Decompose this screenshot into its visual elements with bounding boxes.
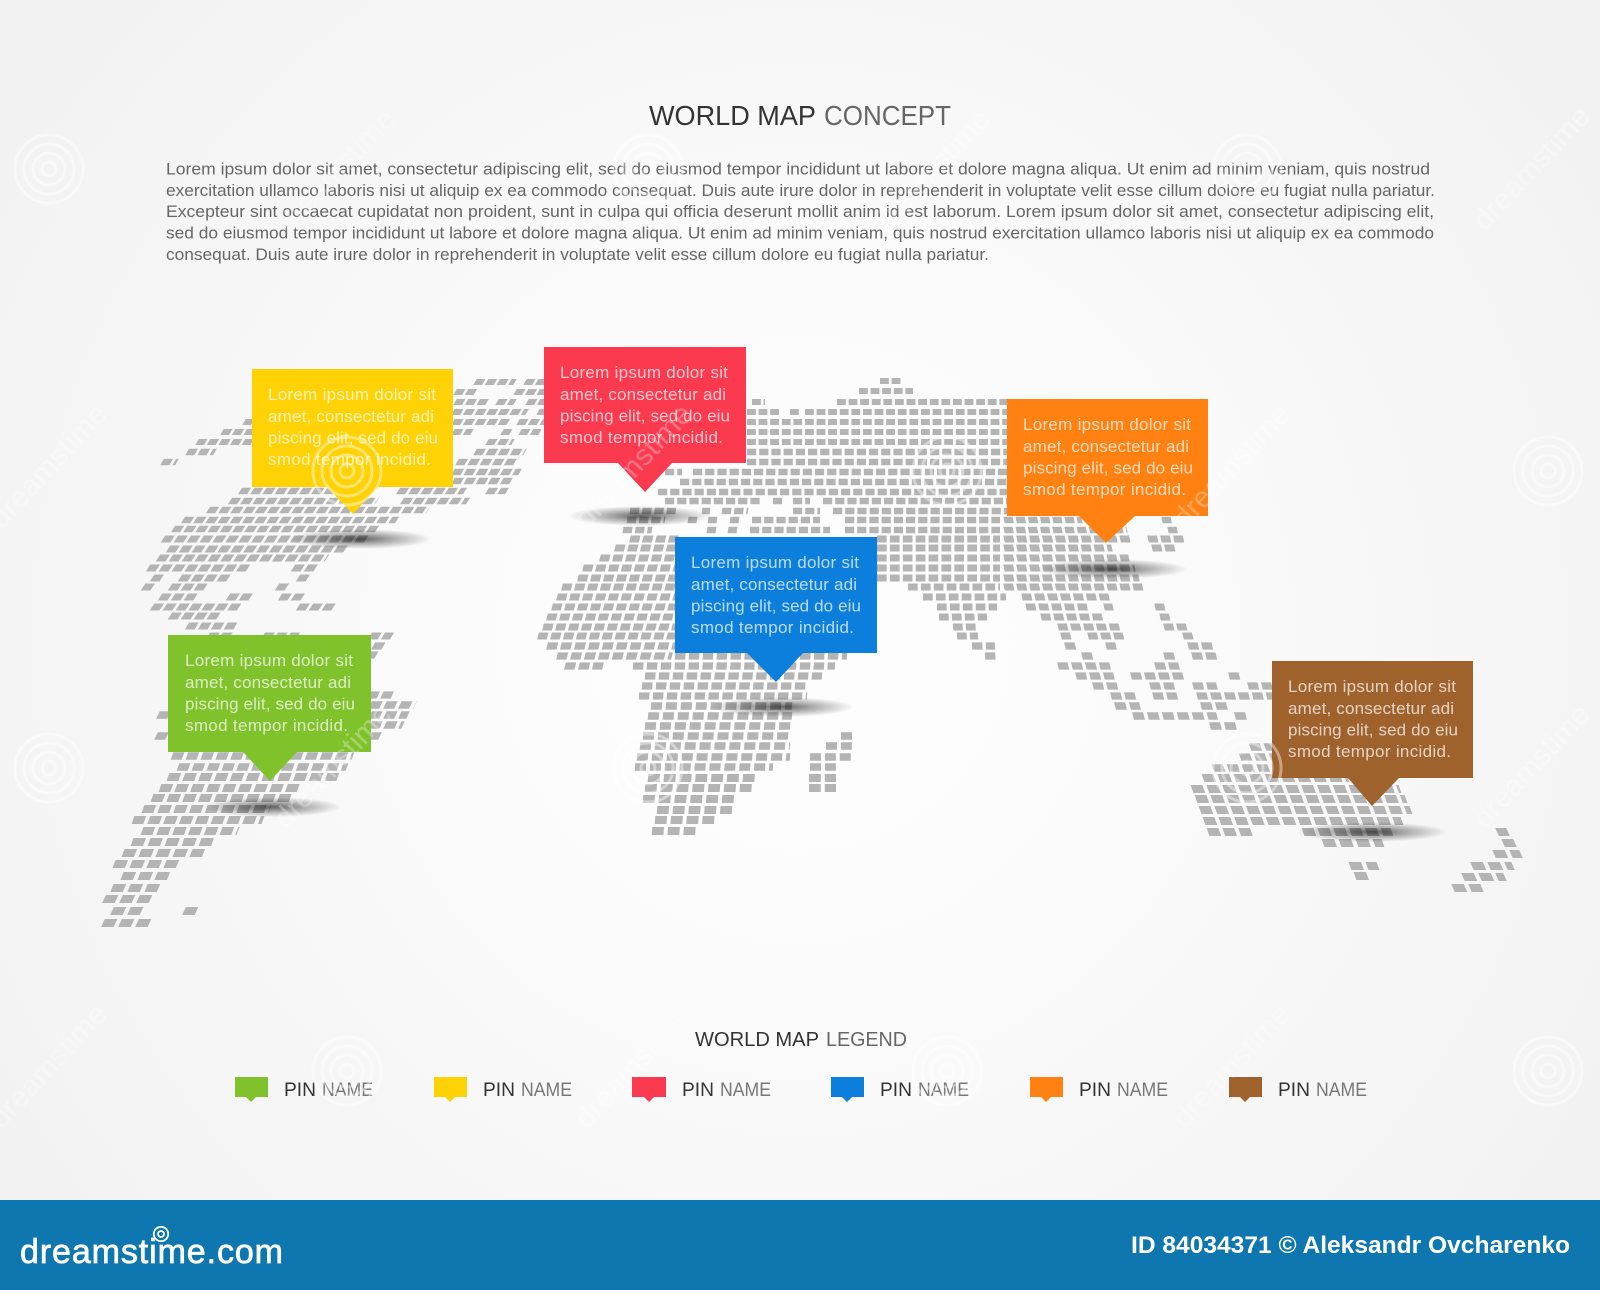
map region: south america [103, 695, 415, 923]
watermark overlay: dreamstime [568, 998, 699, 1135]
callout: yellow pin: piscing elit, sed do eiu [268, 429, 438, 448]
callout: blue pin: Lorem ipsum dolor sit [691, 553, 859, 572]
map region: southeast asia islands [1058, 646, 1274, 726]
callout: red pin: amet, consectetur adi [560, 385, 726, 404]
intro text block: exercitation ullamco laboris nisi ut aliquip ex ea commodo consequat. Duis aute irure dolor in reprehenderit in voluptate velit esse cillum dolore eu fugiat nulla pariatur. [166, 181, 1435, 200]
callout: red pin: smod tempor incidid. [560, 428, 723, 447]
intro text block: sed do eiusmod tempor incididunt ut labore et dolore magna aliqua. Ut enim ad minim veniam, quis nostrud exercitation ullamco laboris nisi ut aliquip ex ea commodo [166, 223, 1434, 242]
callout: brown pin: smod tempor incidid. [1288, 742, 1451, 761]
legend item: brown [1229, 1077, 1367, 1102]
callout: green pin: piscing elit, sed do eiu [185, 695, 355, 714]
callout: brown pin: piscing elit, sed do eiu [1288, 721, 1458, 740]
callout: green pin: amet, consectetur adi [185, 673, 351, 692]
callout: green pin [168, 635, 371, 781]
legend item: green: NAME [322, 1080, 373, 1101]
title: WORLD MAP [649, 100, 816, 131]
callout: blue pin: smod tempor incidid. [691, 618, 854, 637]
watermark overlay: dreamstime [1466, 698, 1597, 835]
legend item: blue [831, 1077, 969, 1102]
legend [235, 1077, 1367, 1102]
map region: central and southern africa [633, 656, 847, 831]
footer bar [0, 1200, 1600, 1290]
watermark overlay: dreamstime [1166, 398, 1297, 535]
callout: yellow pin: amet, consectetur adi [268, 407, 434, 426]
legend item: orange: NAME [1117, 1080, 1168, 1101]
callout: orange pin: amet, consectetur adi [1023, 437, 1189, 456]
map region: north africa [538, 539, 678, 666]
legend heading: WORLD MAP [695, 1028, 819, 1051]
callout: green pin: Lorem ipsum dolor sit [185, 651, 353, 670]
watermark overlay: dreamstime [865, 698, 996, 835]
callout: brown pin: Lorem ipsum dolor sit [1288, 677, 1456, 696]
legend item: yellow [434, 1077, 572, 1102]
callout: red pin: Lorem ipsum dolor sit [560, 363, 728, 382]
legend item: brown: PIN [1278, 1080, 1310, 1101]
map region: new zealand [1453, 832, 1521, 888]
legend item: blue: PIN [880, 1080, 912, 1101]
callout: yellow pin: smod tempor incidid. [268, 450, 431, 469]
intro text block [166, 160, 1435, 264]
legend item: red: PIN [682, 1080, 714, 1101]
legend item: green: PIN [284, 1080, 316, 1101]
legend item: brown: NAME [1316, 1080, 1367, 1101]
intro text block: Excepteur sint occaecat cupidatat non proident, sunt in culpa qui officia deserunt mollit anim id est laborum. Lorem ipsum dolor sit amet, consectetur adipiscing elit, [166, 202, 1434, 221]
footer credit: ID 84034371 © Aleksandr Ovcharenko [1131, 1232, 1570, 1259]
callout: brown pin: amet, consectetur adi [1288, 699, 1454, 718]
callout: red pin [544, 347, 746, 492]
callout: yellow pin: Lorem ipsum dolor sit [268, 385, 436, 404]
legend item: blue: NAME [918, 1080, 969, 1101]
legend item: red [632, 1077, 771, 1102]
map region: europe and central asia [623, 381, 1010, 656]
map region: australia [1192, 747, 1411, 876]
watermark overlay: dreamstime [866, 103, 997, 240]
watermark overlay: dreamstime [267, 698, 398, 835]
footer logo: dreamstime.com [20, 1233, 283, 1271]
callout: orange pin: piscing elit, sed do eiu [1023, 459, 1193, 478]
callout: orange pin: smod tempor incidid. [1023, 480, 1186, 499]
map region: east asia [1004, 520, 1194, 636]
map region: madagascar [809, 736, 852, 788]
watermark overlay: dreamstime [1166, 998, 1297, 1135]
watermark overlay: dreamstime [271, 103, 402, 240]
watermark overlay: dreamstime [1466, 100, 1597, 237]
legend heading: LEGEND [826, 1028, 907, 1051]
legend item: orange: PIN [1079, 1080, 1111, 1101]
callout: orange pin [1007, 399, 1208, 543]
callout: blue pin: piscing elit, sed do eiu [691, 597, 861, 616]
legend heading [695, 1028, 907, 1051]
intro text block: Lorem ipsum dolor sit amet, consectetur adipiscing elit, sed do eiusmod tempor incididunt ut labore et dolore magna aliqua. Ut enim ad minim veniam, quis nostrud [166, 160, 1430, 178]
callout: blue pin: amet, consectetur adi [691, 575, 857, 594]
intro text block: consequat. Duis aute irure dolor in reprehenderit in voluptate velit esse cillum dolore eu fugiat nulla pariatur. [166, 245, 989, 264]
callout: yellow pin [252, 369, 453, 514]
pin shadows [202, 506, 1448, 842]
legend item: green [235, 1077, 373, 1102]
callout: brown pin [1272, 661, 1473, 806]
map region: north america and greenland [143, 382, 546, 655]
legend item: yellow: NAME [521, 1080, 572, 1101]
legend item: red: NAME [720, 1080, 771, 1101]
dotted world map [103, 381, 1521, 923]
callout: blue pin [675, 537, 877, 682]
callout: green pin: smod tempor incidid. [185, 716, 348, 735]
title: CONCEPT [824, 100, 951, 131]
legend item: yellow: PIN [483, 1080, 515, 1101]
title [649, 100, 951, 131]
legend item: orange [1030, 1077, 1168, 1102]
callout: orange pin: Lorem ipsum dolor sit [1023, 415, 1191, 434]
callout: red pin: piscing elit, sed do eiu [560, 407, 730, 426]
watermark overlay: dreamstime [568, 398, 699, 535]
